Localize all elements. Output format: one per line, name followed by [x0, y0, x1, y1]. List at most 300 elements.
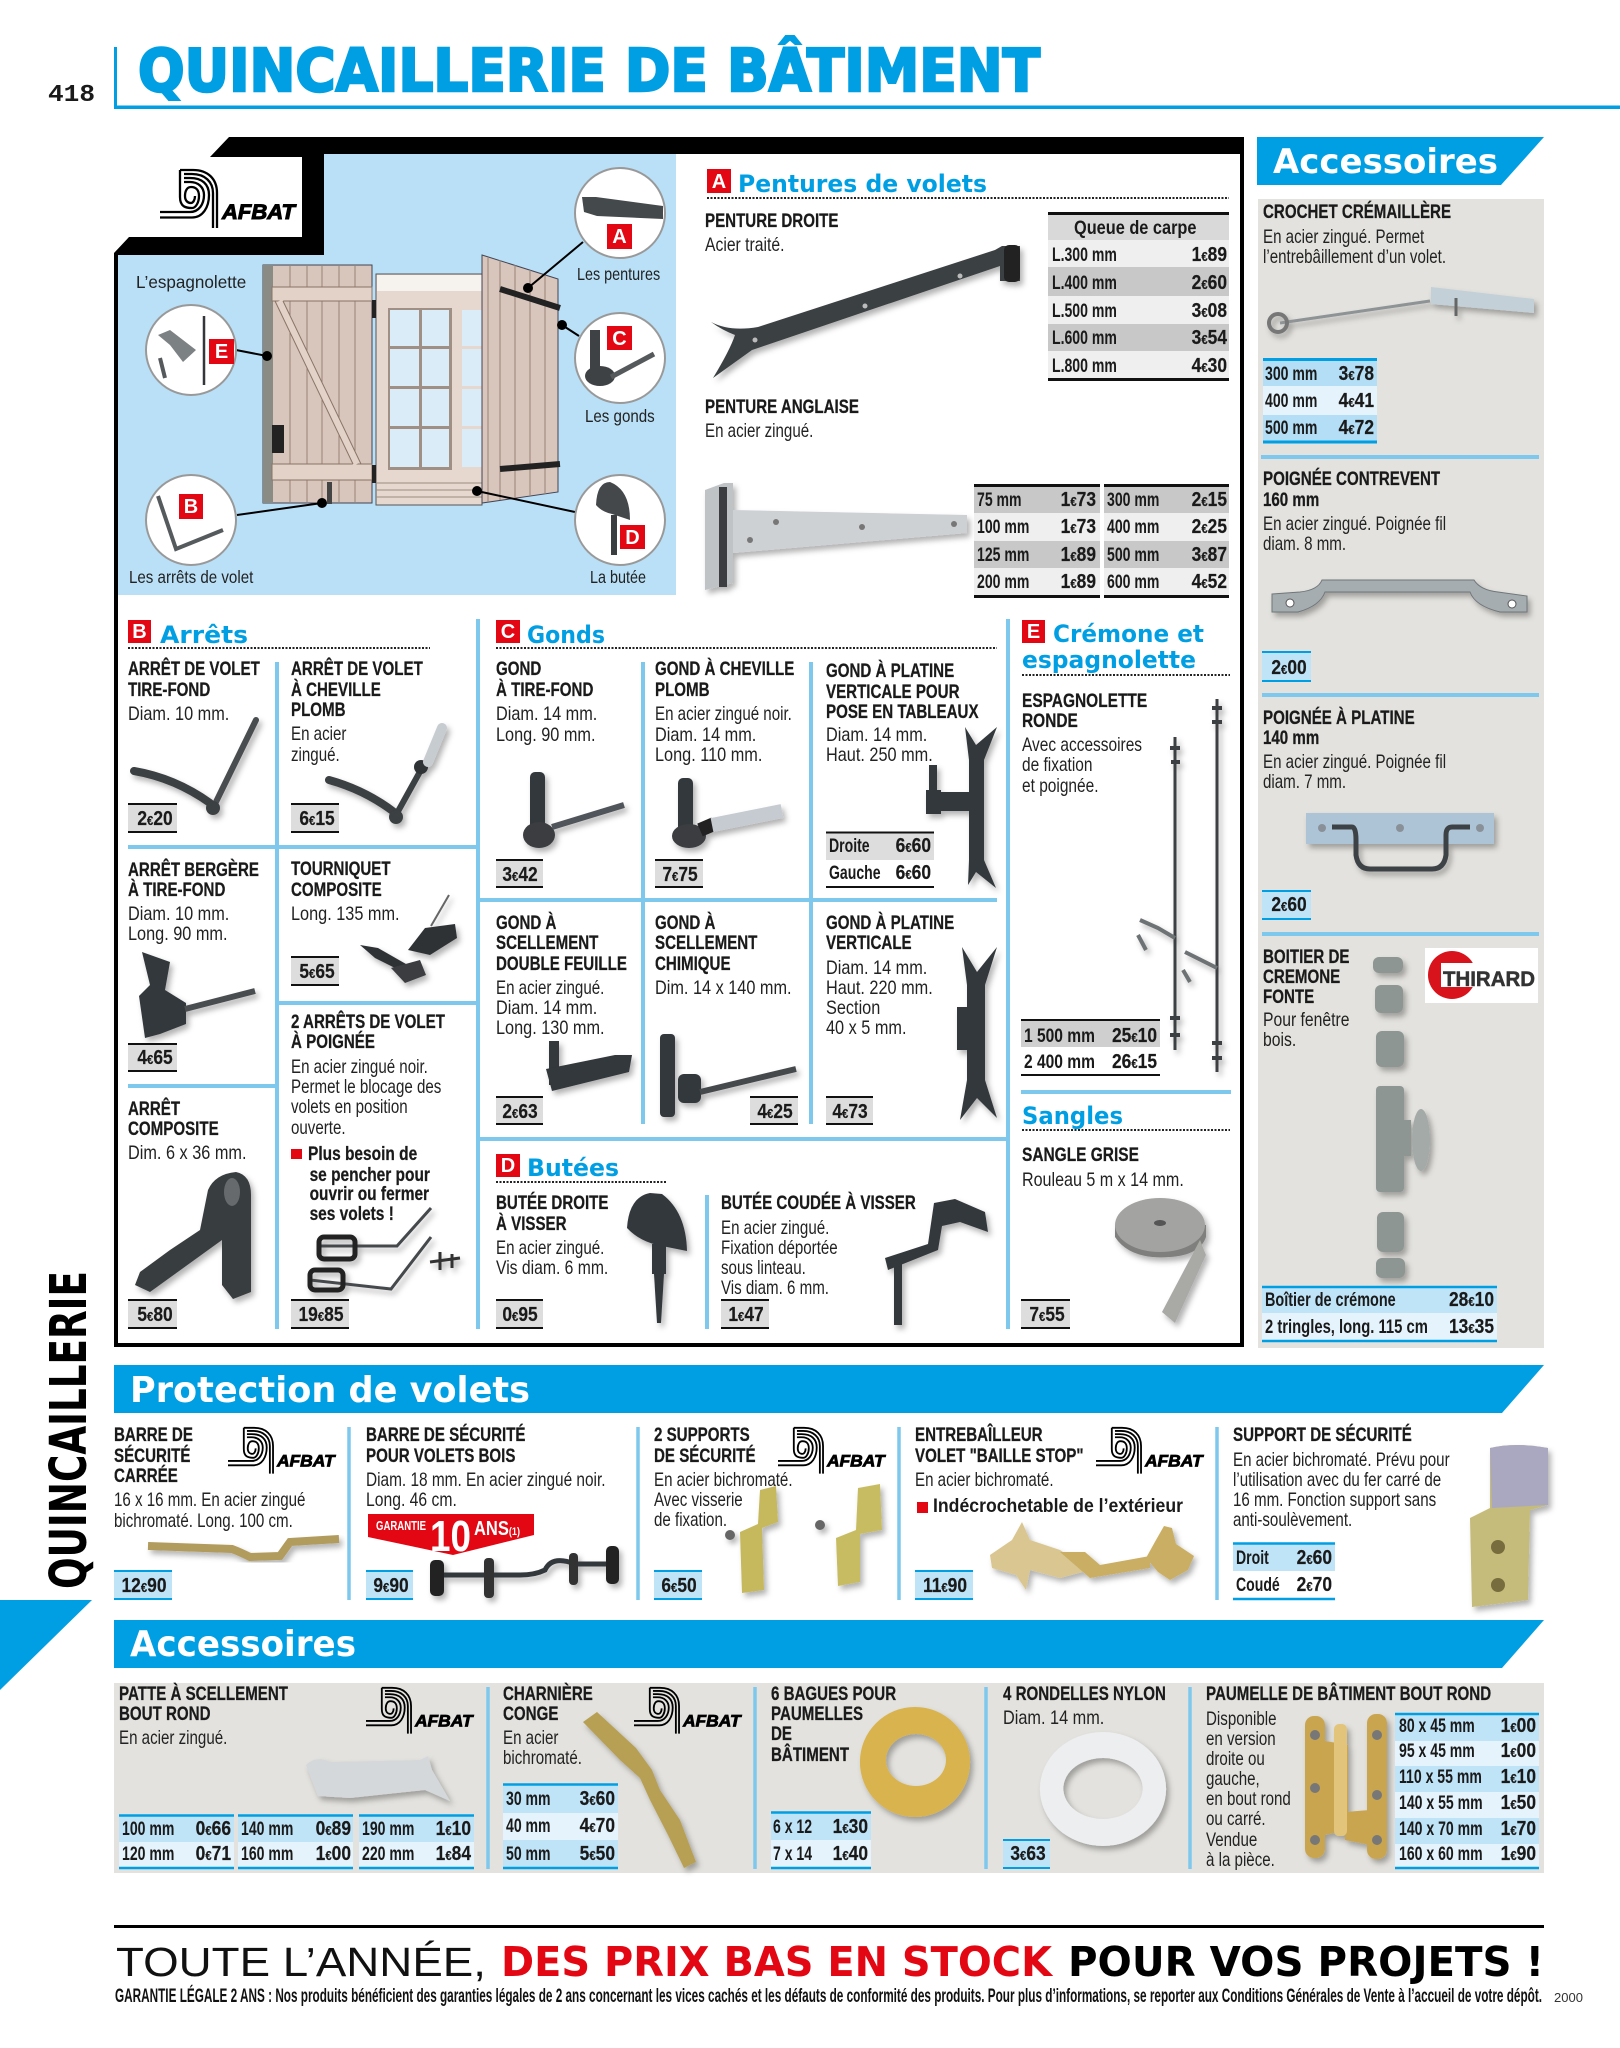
- product: espagnolette ronde: Avec accessoires: [1022, 733, 1142, 755]
- product: 6 bagues pour paumelles: 6 BAGUES POUR: [771, 1682, 896, 1704]
- banner: accessoires (right column): Accessoires: [1273, 142, 1498, 182]
- price: 7€55: [1029, 1303, 1065, 1325]
- product: gond à scellement chimique: GOND À: [655, 910, 716, 933]
- product: gond à platine verticale pour pose en tableaux: Diam. 14 mm.: [826, 724, 927, 745]
- product: paumelle de bâtiment: PAUMELLE DE BÂTIMENT BOUT ROND: [1206, 1681, 1491, 1704]
- image: [1373, 957, 1430, 1278]
- image: [926, 727, 997, 888]
- table: 190 mm: [362, 1818, 414, 1840]
- table: penture anglaise: 1€73: [1061, 515, 1096, 537]
- price: 0€95: [502, 1303, 538, 1325]
- price: 6€15: [299, 807, 335, 829]
- product: arrêt de volet tire-fond: TIRE-FOND: [128, 678, 210, 700]
- product: espagnolette ronde: ESPAGNOLETTE: [1022, 689, 1147, 711]
- price: [291, 1299, 349, 1329]
- heading: Crémone et: [1053, 620, 1204, 648]
- product: gond à cheville plomb: En acier zingué noir.: [655, 702, 792, 724]
- image: penture droite: [711, 245, 1020, 378]
- callout B: les arrêts de volet: B: [184, 496, 198, 518]
- product: butée coudée à visser: Vis diam. 6 mm.: [721, 1276, 829, 1298]
- table: Boîtier de crémone: [1265, 1289, 1396, 1311]
- table: 1€84: [436, 1842, 472, 1864]
- product: boitier de cremone fonte: CREMONE: [1263, 965, 1340, 987]
- image: [329, 728, 442, 824]
- table: penture anglaise: 500 mm: [1107, 544, 1159, 566]
- price: [366, 1570, 413, 1600]
- product: poignée à platine: [1262, 705, 1494, 920]
- product: gond à scellement double feuille: Diam. 14 mm.: [496, 997, 597, 1018]
- table: 1€40: [833, 1842, 868, 1864]
- price: [654, 1570, 702, 1600]
- product: poignée à platine: diam. 7 mm.: [1263, 770, 1346, 792]
- badge E: [1022, 620, 1045, 643]
- image: [360, 895, 457, 983]
- product: barre de sécurité carrée: 16 x 16 mm. En acier zingué: [114, 1488, 305, 1510]
- image: penture anglaise: [705, 483, 967, 590]
- product: arrêt de volet tire-fond: [128, 656, 260, 833]
- product: gond à scellement double feuille: DOUBLE FEUILLE: [496, 952, 627, 974]
- table: 80 x 45 mm: [1399, 1715, 1475, 1737]
- product: tourniquet composite: Long. 135 mm.: [291, 903, 400, 924]
- price: [1262, 890, 1311, 920]
- product: patte à scellement: [119, 1681, 475, 1868]
- price: 2€63: [502, 1100, 538, 1122]
- product: espagnolette ronde: de fixation: [1022, 753, 1092, 775]
- product: paumelle de bâtiment: ou carré.: [1206, 1807, 1266, 1829]
- product: gond à platine verticale pour pose en tableaux: VERTICALE POUR: [826, 680, 960, 702]
- product: paumelle de bâtiment: à la pièce.: [1206, 1848, 1275, 1870]
- table: 140 x 55 mm: [1399, 1792, 1483, 1814]
- product: arrêt de volet à cheville plomb: zingué.: [291, 743, 340, 765]
- product: espagnolette ronde: et poignée.: [1022, 774, 1099, 796]
- product: charnière congé: CONGE: [503, 1702, 558, 1724]
- garantie badge: GARANTIE: [376, 1518, 426, 1533]
- product: arrêt de volet à cheville plomb: À CHEVILLE: [291, 677, 381, 700]
- table: 4€41: [1339, 389, 1374, 411]
- image: [430, 1546, 619, 1598]
- table: 140 x 70 mm: [1399, 1818, 1483, 1840]
- product: butée coudée à visser: En acier zingué.: [721, 1216, 829, 1238]
- product: 4 rondelles nylon: 4 RONDELLES NYLON: [1003, 1682, 1166, 1704]
- image: [1306, 813, 1494, 869]
- image: [1269, 287, 1534, 332]
- table: queue de carpe: L.500 mm: [1052, 300, 1117, 322]
- price: [291, 956, 339, 986]
- badge A: [707, 169, 731, 193]
- badge A: A: [712, 171, 726, 193]
- product: gond à platine verticale: Haut. 220 mm.: [826, 977, 933, 998]
- product: paumelle de bâtiment: en bout rond: [1206, 1787, 1291, 1809]
- table: queue de carpe: L.600 mm: [1052, 327, 1117, 349]
- product: espagnolette ronde: [1021, 689, 1222, 1075]
- image: [885, 1199, 988, 1325]
- badge B: B: [132, 621, 147, 643]
- callout E: l'espagnolette: L’espagnolette: [136, 272, 246, 292]
- product: arrêt de volet à cheville plomb: ARRÊT DE VOLET: [291, 656, 423, 679]
- price: [750, 1096, 798, 1125]
- price: 2€60: [1271, 893, 1307, 915]
- red callout: Plus besoin de: [308, 1142, 417, 1164]
- product: gond à platine verticale: 40 x 5 mm.: [826, 1017, 906, 1038]
- table: 160 mm: [241, 1843, 293, 1865]
- table: penture anglaise: 600 mm: [1107, 571, 1159, 593]
- price: [496, 1096, 543, 1125]
- table: 2€60: [1297, 1546, 1332, 1568]
- table: queue de carpe: Queue de carpe: [1074, 217, 1197, 238]
- product: gond à tire-fond: Long. 90 mm.: [496, 724, 596, 745]
- table: [1262, 1287, 1497, 1341]
- garantie badge: ANS(1): [474, 1518, 520, 1540]
- product: barre de sécurité carrée: CARRÉE: [114, 1463, 178, 1486]
- table: queue de carpe: L.300 mm: [1052, 244, 1117, 266]
- product: crochet crémaillère: En acier zingué. Permet: [1263, 225, 1424, 247]
- table: 400 mm: [1265, 390, 1317, 412]
- badge B: [128, 620, 151, 643]
- product: arrêt composite: COMPOSITE: [128, 1117, 219, 1139]
- table: 220 mm: [362, 1843, 414, 1865]
- product: butée droite: À VISSER: [496, 1211, 567, 1234]
- table: 4€70: [580, 1814, 615, 1836]
- image: [860, 1707, 970, 1817]
- product: gond à scellement chimique: CHIMIQUE: [655, 952, 731, 974]
- product: 2 arrêts de volet à poignée: volets en position: [291, 1095, 408, 1117]
- section E: crémone et espagnolette: [1021, 620, 1231, 1329]
- product: poignée à platine: En acier zingué. Poignée fil: [1263, 750, 1446, 772]
- product: gond à platine verticale: GOND À PLATINE: [826, 910, 954, 933]
- callout B: les arrêts de volet: [129, 475, 254, 587]
- product: 2 arrêts de volet à poignée: Permet le blocage des: [291, 1075, 441, 1097]
- table: 1€70: [1501, 1817, 1536, 1839]
- table: 13€35: [1449, 1315, 1494, 1337]
- price: 6€50: [661, 1574, 697, 1596]
- heading: Arrêts: [160, 621, 248, 649]
- table: 6€60: [896, 834, 931, 856]
- badge D: [496, 1154, 520, 1177]
- table: queue de carpe: 4€30: [1192, 354, 1227, 376]
- product: tourniquet composite: [291, 857, 457, 986]
- product: paumelle de bâtiment: Disponible: [1206, 1707, 1277, 1729]
- product: 2 supports de sécurité: de fixation.: [654, 1508, 727, 1530]
- product: charnière congé: bichromaté.: [503, 1746, 582, 1768]
- product: arrêt composite: [128, 1096, 251, 1329]
- price: 7€75: [662, 863, 698, 885]
- afbat logo: AFBAT: [826, 1452, 887, 1471]
- table: [1263, 360, 1377, 442]
- product: barre de sécurité pour volets bois: BARRE DE SÉCURITÉ: [366, 1422, 526, 1445]
- slogan: [116, 1938, 1544, 1986]
- footer: [114, 1925, 1583, 2007]
- table: penture anglaise: 1€89: [1061, 543, 1096, 565]
- table: 300 mm: [1265, 363, 1317, 385]
- afbat logo: [160, 170, 297, 228]
- heading: Pentures de volets: [738, 170, 987, 198]
- price: [128, 1043, 177, 1072]
- leader lines: [236, 242, 583, 515]
- product: gond à platine verticale pour pose en tableaux: GOND À PLATINE: [826, 658, 954, 681]
- title: QUINCAILLERIE DE BÂTIMENT: [138, 36, 1040, 105]
- product: penture anglaise: PENTURE ANGLAISE: [705, 395, 859, 417]
- table: [119, 1816, 474, 1868]
- price: 11€90: [923, 1574, 967, 1596]
- product: tourniquet composite: TOURNIQUET: [291, 857, 391, 879]
- callout D: la butée: La butée: [590, 568, 646, 587]
- product: 4 rondelles nylon: Diam. 14 mm.: [1003, 1707, 1104, 1728]
- price: 4€73: [832, 1100, 868, 1122]
- table: queue de carpe: 2€60: [1192, 271, 1227, 293]
- product: gond à platine verticale pour pose en tableaux: [826, 658, 997, 888]
- badge C: [496, 620, 520, 643]
- table: 6€60: [896, 861, 931, 883]
- product: barre de sécurité pour volets bois: Diam. 18 mm. En acier zingué noir.: [366, 1468, 605, 1490]
- callout E: l'espagnolette: E: [215, 341, 228, 363]
- image: [1115, 1198, 1206, 1323]
- product: gond à scellement chimique: Dim. 14 x 140 mm.: [655, 977, 792, 998]
- table: 3€78: [1339, 362, 1374, 384]
- product: espagnolette ronde: RONDE: [1022, 709, 1078, 731]
- panel: accessoires bottom row: [114, 1681, 1544, 1873]
- image: [134, 720, 256, 815]
- product: boitier de cremone fonte: bois.: [1263, 1029, 1296, 1050]
- price: 4€25: [757, 1100, 793, 1122]
- product: barre de sécurité carrée: [114, 1423, 339, 1600]
- table: 160 x 60 mm: [1399, 1843, 1483, 1865]
- product: gond à platine verticale: Section: [826, 997, 880, 1018]
- product: poignée à platine: 140 mm: [1263, 726, 1319, 748]
- product: butée coudée à visser: BUTÉE COUDÉE À VISSER: [721, 1190, 916, 1213]
- table: 25€10: [1112, 1024, 1157, 1046]
- table: 0€66: [196, 1817, 231, 1839]
- product: poignée à platine: POIGNÉE À PLATINE: [1263, 705, 1415, 728]
- product: gond à platine verticale: Diam. 14 mm.: [826, 957, 927, 978]
- table: penture anglaise: 2€15: [1192, 488, 1227, 510]
- slogan: TOUTE L’ANNÉE,: [116, 1939, 486, 1985]
- product: poignée contrevent: [1262, 466, 1527, 682]
- table: penture anglaise: 75 mm: [977, 489, 1022, 511]
- product: support de sécurité: SUPPORT DE SÉCURITÉ: [1233, 1422, 1412, 1445]
- table: 28€10: [1449, 1288, 1494, 1310]
- product: gond à scellement double feuille: [496, 910, 632, 1125]
- table: penture anglaise: 1€73: [1061, 488, 1096, 510]
- image: [627, 1193, 687, 1323]
- product: 2 supports de sécurité: Avec visserie: [654, 1488, 743, 1510]
- red callout: Indécrochetable de l’extérieur: [933, 1496, 1184, 1517]
- price: 5€80: [137, 1303, 173, 1325]
- table: queue de carpe: L.400 mm: [1052, 272, 1117, 294]
- side label: quincaillerie: QUINCAILLERIE: [40, 1271, 99, 1589]
- afbat logo: [634, 1688, 743, 1734]
- panel: shutter diagram: [118, 154, 676, 595]
- afbat logo: [778, 1428, 887, 1474]
- product: 2 arrêts de volet à poignée: ouverte.: [291, 1116, 346, 1138]
- product: charnière congé: En acier: [503, 1726, 559, 1748]
- product: gond à platine verticale: [826, 910, 997, 1125]
- product: butée droite: En acier zingué.: [496, 1236, 604, 1258]
- image: [546, 1041, 632, 1091]
- red callout: [291, 1142, 430, 1224]
- product: support de sécurité: En acier bichromaté. Prévu pour: [1233, 1448, 1450, 1470]
- product: gond à cheville plomb: [655, 656, 794, 888]
- product: butée droite: Vis diam. 6 mm.: [496, 1257, 608, 1278]
- table: 1€10: [436, 1817, 471, 1839]
- afbat logo: [1096, 1428, 1205, 1474]
- product: arrêt de volet à cheville plomb: En acier: [291, 722, 347, 744]
- product: penture anglaise: [705, 395, 967, 590]
- table: 40 mm: [506, 1815, 551, 1837]
- afbat logo: AFBAT: [221, 201, 297, 224]
- image: [139, 952, 255, 1038]
- product: barre de sécurité carrée: SÉCURITÉ: [114, 1443, 190, 1466]
- product: penture droite: Acier traité.: [705, 234, 784, 255]
- table: 1 500 mm: [1024, 1025, 1095, 1046]
- heading: sangles: Sangles: [1022, 1102, 1123, 1130]
- price: [114, 1570, 172, 1600]
- callout C: les gonds: C: [612, 328, 627, 350]
- product: charnière congé: CHARNIÈRE: [503, 1681, 593, 1704]
- reference code: 2000: [1554, 1990, 1583, 2005]
- product: poignée contrevent: POIGNÉE CONTREVENT: [1263, 466, 1440, 489]
- table: queue de carpe: 1€89: [1192, 243, 1227, 265]
- price: [291, 804, 339, 833]
- product: 2 supports de sécurité: [654, 1423, 887, 1600]
- page number: 418: [48, 82, 95, 109]
- image: [990, 1522, 1194, 1590]
- product: arrêt bergère: À TIRE-FOND: [128, 877, 225, 900]
- table: 110 x 55 mm: [1399, 1766, 1482, 1788]
- header rule: [114, 47, 1620, 109]
- price: 19€85: [299, 1303, 343, 1325]
- image: [957, 947, 997, 1120]
- table: queue de carpe: L.800 mm: [1052, 355, 1117, 377]
- product: gond à scellement double feuille: En acier zingué.: [496, 976, 604, 998]
- price: 3€63: [1010, 1842, 1046, 1864]
- product: penture droite: PENTURE DROITE: [705, 209, 838, 231]
- product: 2 arrêts de volet à poignée: 2 ARRÊTS DE VOLET: [291, 1009, 445, 1032]
- callout B: les arrêts de volet: Les arrêts de volet: [129, 567, 254, 587]
- product: poignée contrevent: diam. 8 mm.: [1263, 532, 1346, 554]
- product: arrêt de volet tire-fond: ARRÊT DE VOLET: [128, 656, 260, 679]
- heading: [1022, 620, 1204, 674]
- product: sangle grise: [1021, 1143, 1206, 1329]
- image: [310, 1208, 460, 1290]
- product: boitier de cremone fonte: Pour fenêtre: [1263, 1009, 1349, 1030]
- section B: arrêts: [128, 620, 460, 1329]
- image: [1305, 1714, 1387, 1859]
- product: arrêt de volet à cheville plomb: PLOMB: [291, 698, 346, 720]
- price: [1021, 1299, 1070, 1329]
- price: 9€90: [373, 1574, 409, 1596]
- section C: gonds: [496, 620, 997, 1125]
- table: queue de carpe: 3€54: [1192, 326, 1228, 348]
- price: [1003, 1839, 1050, 1869]
- product: 2 arrêts de volet à poignée: [291, 1009, 460, 1329]
- product: support de sécurité: anti-soulèvement.: [1233, 1508, 1352, 1530]
- heading: espagnolette: [1022, 646, 1196, 674]
- product: 6 bagues pour paumelles: [771, 1682, 970, 1868]
- product: paumelle de bâtiment: droite ou: [1206, 1747, 1265, 1769]
- price: 2€00: [1271, 656, 1307, 678]
- product: 4 rondelles nylon: [1003, 1682, 1166, 1869]
- table: 1€00: [316, 1842, 351, 1864]
- product: gond à cheville plomb: PLOMB: [655, 678, 710, 700]
- afbat logo: AFBAT: [414, 1712, 475, 1731]
- product: barre de sécurité pour volets bois: [366, 1422, 619, 1600]
- callout D: la butée: [575, 475, 665, 587]
- product: boitier de cremone fonte: FONTE: [1263, 985, 1314, 1007]
- image: [1470, 1445, 1548, 1607]
- table: 1€90: [1501, 1842, 1536, 1864]
- table: Droite: [829, 835, 870, 857]
- callout A: les pentures: [575, 168, 665, 284]
- table: 3€60: [580, 1787, 615, 1809]
- banner: accessoires (bottom): Accessoires: [130, 1624, 356, 1665]
- red callout: ses volets !: [310, 1202, 394, 1224]
- product: support de sécurité: 16 mm. Fonction support sans: [1233, 1488, 1436, 1510]
- image: [135, 1172, 251, 1299]
- price: [1262, 651, 1311, 682]
- table: [1233, 1544, 1335, 1599]
- product: gond à tire-fond: [496, 657, 624, 888]
- product: barre de sécurité carrée: bichromaté. Long. 100 cm.: [114, 1509, 293, 1531]
- table: 1€50: [1501, 1791, 1536, 1813]
- product: patte à scellement: PATTE À SCELLEMENT: [119, 1681, 288, 1704]
- slogan: POUR VOS PROJETS !: [1068, 1938, 1544, 1986]
- price: [655, 859, 703, 888]
- product: sangle grise: Rouleau 5 m x 14 mm.: [1022, 1169, 1184, 1190]
- image: [306, 1756, 450, 1801]
- logo: thirard: [1425, 948, 1538, 1003]
- table: penture anglaise: 4€52: [1192, 570, 1227, 592]
- price: 12€90: [122, 1574, 166, 1596]
- price: 2€20: [137, 807, 173, 829]
- table: [1021, 1020, 1160, 1075]
- price: 5€65: [299, 960, 335, 982]
- table: penture anglaise: [974, 484, 1229, 598]
- section D: butées: [496, 1154, 988, 1329]
- price: [128, 1299, 177, 1329]
- side corner triangle: [0, 1600, 92, 1690]
- product: charnière congé: [503, 1681, 743, 1868]
- price: 3€42: [502, 863, 538, 885]
- product: 2 supports de sécurité: 2 SUPPORTS: [654, 1423, 750, 1445]
- product: 6 bagues pour paumelles: BÂTIMENT: [771, 1742, 849, 1765]
- product: 6 bagues pour paumelles: PAUMELLES: [771, 1702, 863, 1724]
- table: 0€71: [196, 1842, 231, 1864]
- table: penture anglaise: 400 mm: [1107, 516, 1159, 538]
- product: barre de sécurité pour volets bois: Long. 46 cm.: [366, 1489, 457, 1510]
- banner: accessoires (bottom): [114, 1620, 1544, 1668]
- price: 1€47: [728, 1303, 764, 1325]
- product: boitier de cremone fonte: [1262, 945, 1538, 1341]
- table: 4€72: [1339, 416, 1374, 438]
- afbat logo: AFBAT: [682, 1712, 743, 1731]
- red callout: se pencher pour: [310, 1163, 430, 1185]
- product: crochet crémaillère: l’entrebâillement d’un volet.: [1263, 245, 1446, 267]
- image: [583, 1712, 696, 1868]
- table: [826, 832, 934, 887]
- product: barre de sécurité carrée: BARRE DE: [114, 1423, 193, 1445]
- callout A: les pentures: Les pentures: [577, 265, 660, 284]
- product: gond à cheville plomb: GOND À CHEVILLE: [655, 656, 794, 679]
- table: 2 tringles, long. 115 cm: [1265, 1316, 1428, 1337]
- product: gond à scellement chimique: [655, 910, 798, 1125]
- table: [771, 1812, 871, 1868]
- product: entrebâilleur volet baille stop: VOLET "BAILLE STOP": [915, 1444, 1084, 1466]
- garantie badge: 10: [430, 1512, 471, 1561]
- callout E: l'espagnolette: [136, 272, 246, 395]
- product: sangle grise: SANGLE GRISE: [1022, 1143, 1139, 1165]
- table: queue de carpe: 3€08: [1192, 299, 1227, 321]
- product: patte à scellement: En acier zingué.: [119, 1726, 227, 1748]
